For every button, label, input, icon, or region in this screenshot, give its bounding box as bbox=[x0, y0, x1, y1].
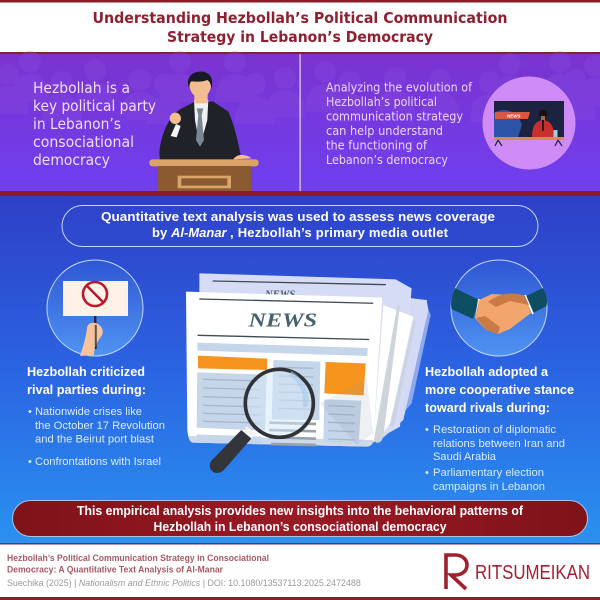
text: Hezbollah adopted bbox=[425, 365, 574, 493]
text: Hezbollah criticized: Confrontations with Israel bbox=[35, 456, 161, 468]
citation text bbox=[7, 553, 361, 588]
callout: quantitative text analysis: Quantitative text analysis was used to assess news coverage bbox=[101, 209, 495, 224]
callout: conclusion pill: This empirical analysis provides new insights into the behavioral patterns of bbox=[77, 504, 524, 518]
logo: Ritsumeikan bbox=[446, 555, 590, 589]
callout: quantitative text analysis bbox=[62, 206, 538, 246]
text: Hezbollah adopted: • bbox=[425, 424, 429, 436]
text: Hezbollah adopted: more cooperative stance bbox=[425, 383, 574, 397]
callout: conclusion pill: Hezbollah in Lebanon’s consociational democracy bbox=[154, 520, 447, 534]
text: Hezbollah criticized: • bbox=[28, 406, 32, 418]
text: Hezbollah adopted: Saudi Arabia bbox=[433, 451, 497, 463]
text: Hezbollah key party: democracy bbox=[33, 151, 110, 169]
icon: protest sign bbox=[47, 260, 143, 356]
panel: purple intro bbox=[0, 51, 600, 196]
background: blue main area bbox=[0, 196, 600, 544]
text: Hezbollah adopted: relations between Iran and bbox=[433, 438, 565, 450]
text: Hezbollah key party: key political party bbox=[33, 97, 156, 115]
text: Hezbollah key party: consociational bbox=[33, 133, 134, 151]
title banner: Strategy in Lebanon’s Democracy bbox=[167, 28, 433, 46]
citation text: Democracy: A Quantitative Text Analysis of Al-Manar bbox=[7, 564, 223, 576]
text: Hezbollah adopted: Restoration of diplomatic bbox=[433, 424, 557, 436]
text: Hezbollah key party: Hezbollah is a bbox=[33, 79, 130, 97]
text: Hezbollah criticized: the October 17 Revolution bbox=[35, 420, 165, 432]
title banner: Understanding Hezbollah’s Political Communication bbox=[92, 9, 508, 27]
callout: quantitative text analysis: , Hezbollah’s primary media outlet bbox=[230, 225, 449, 240]
text: analyzing evolution: Lebanon’s democracy bbox=[326, 152, 449, 167]
title banner bbox=[0, 0, 600, 54]
callout: conclusion pill bbox=[12, 500, 588, 536]
text: analyzing evolution: can help understand bbox=[326, 123, 443, 138]
icon: handshake bbox=[451, 260, 547, 356]
text: analyzing evolution: the functioning of bbox=[326, 138, 428, 152]
text: analyzing evolution: Analyzing the evolution of bbox=[326, 80, 473, 94]
icon: television news anchor bbox=[482, 76, 576, 170]
text: Hezbollah criticized: Nationwide crises like bbox=[35, 406, 142, 418]
illustration: newspaper and magnifying glass: NEWS bbox=[264, 289, 295, 300]
text: Hezbollah adopted: Hezbollah adopted a bbox=[425, 365, 549, 379]
citation text: Suechika (2025) | Nationalism and Ethnic Politics | DOI: 10.1080/13537113.2025.2472488 bbox=[7, 578, 361, 588]
text: analyzing evolution: communication strategy bbox=[326, 108, 464, 124]
text: Hezbollah adopted: Parliamentary election bbox=[433, 467, 544, 479]
callout: quantitative text analysis: Al-Manar bbox=[170, 225, 228, 240]
illustration: newspaper and magnifying glass bbox=[186, 273, 431, 473]
illustration: newspaper and magnifying glass: NEWS bbox=[247, 309, 317, 331]
text: Hezbollah key party bbox=[33, 79, 156, 169]
text: Hezbollah criticized: rival parties during: bbox=[27, 383, 146, 397]
text: analyzing evolution: Hezbollah’s political bbox=[326, 94, 437, 109]
text: Hezbollah adopted: toward rivals during: bbox=[425, 401, 550, 415]
text: Hezbollah criticized: • bbox=[28, 456, 32, 468]
text: Hezbollah adopted: campaigns in Lebanon bbox=[433, 481, 545, 493]
icon: television news anchor: NEWS bbox=[507, 114, 520, 119]
text: Hezbollah criticized bbox=[27, 365, 165, 468]
icon: speaker at podium bbox=[149, 72, 259, 191]
text: Hezbollah criticized: and the Beirut port blast bbox=[35, 434, 154, 446]
citation text: Hezbollah’s Political Communication Strategy in Consociational bbox=[7, 553, 269, 564]
text: analyzing evolution bbox=[326, 80, 473, 167]
footer bbox=[0, 543, 600, 600]
text: Hezbollah adopted: • bbox=[425, 467, 429, 479]
text: Hezbollah key party: in Lebanon’s bbox=[33, 115, 121, 133]
text: Hezbollah criticized: Hezbollah criticized bbox=[27, 365, 145, 379]
callout: quantitative text analysis: by bbox=[152, 225, 168, 240]
